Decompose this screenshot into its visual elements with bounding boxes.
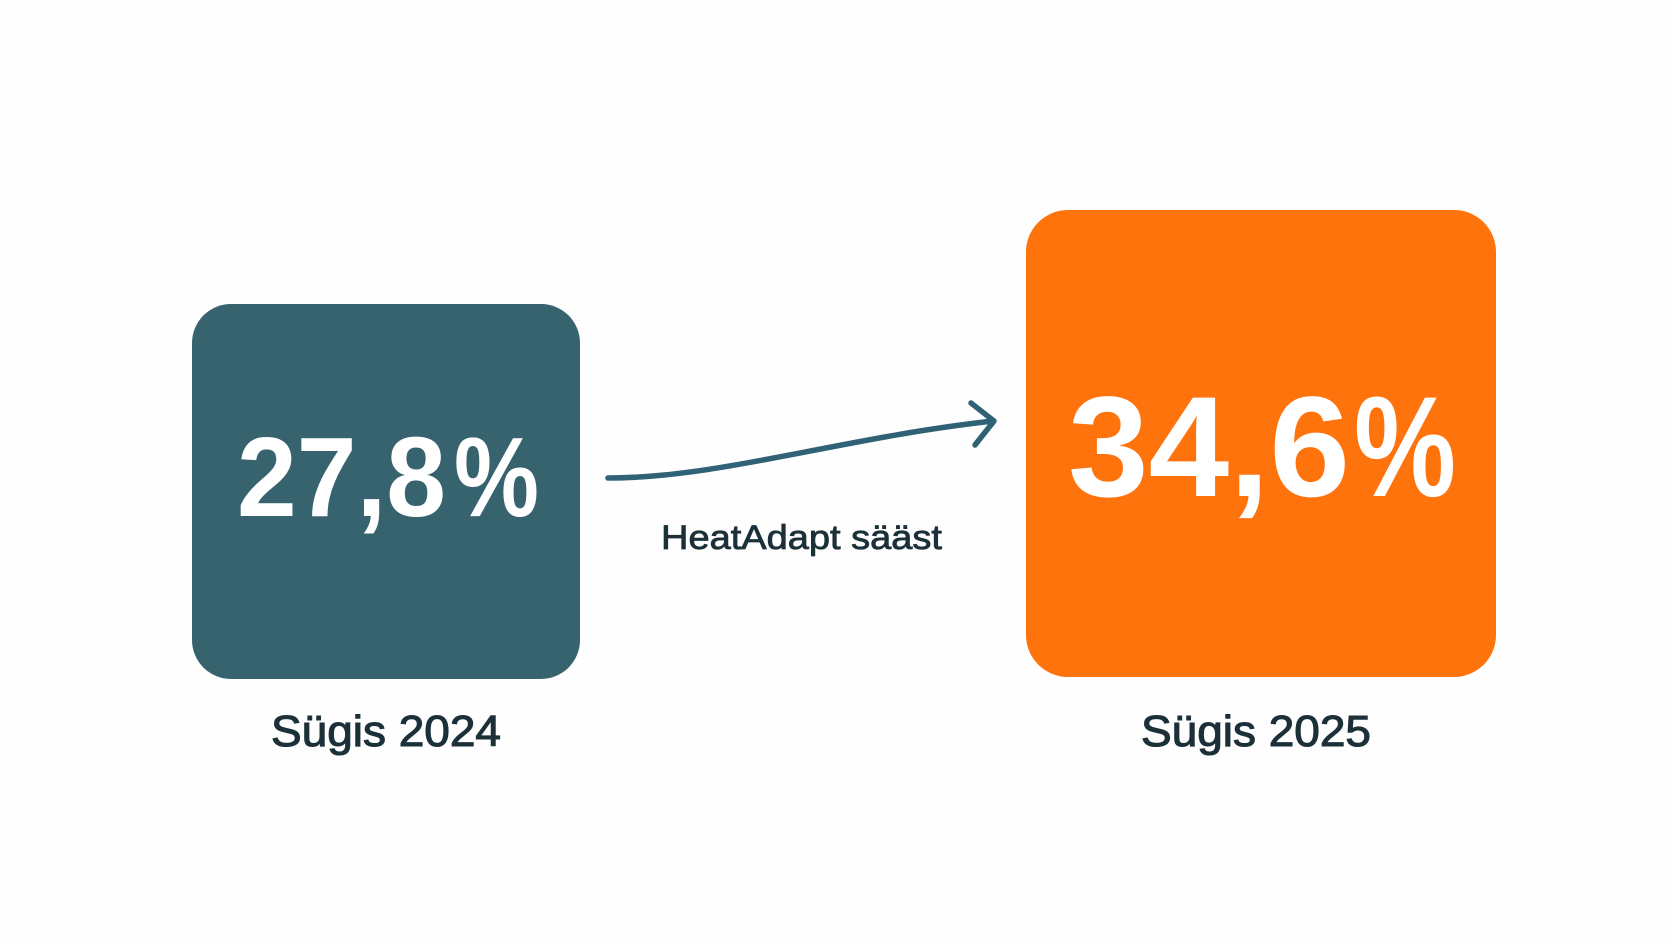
value: 27,8%: % xyxy=(454,414,539,540)
label: Sügis 2024: Sügis 2024 xyxy=(271,707,501,756)
value: 34,6%: 34,6 xyxy=(1068,368,1350,527)
orange square xyxy=(1026,210,1496,677)
label: Sügis 2025: Sügis 2025 xyxy=(1141,707,1371,756)
teal square xyxy=(192,304,580,679)
value: 27,8%: 27,8 xyxy=(237,414,446,540)
panel: autumn 2025 xyxy=(1026,210,1496,756)
value: 34,6%: % xyxy=(1354,368,1456,527)
panel: autumn 2024 xyxy=(192,304,580,756)
arrow: 2024 to 2025 xyxy=(608,403,994,478)
caption: HeatAdapt sääst: HeatAdapt sääst xyxy=(661,519,943,557)
